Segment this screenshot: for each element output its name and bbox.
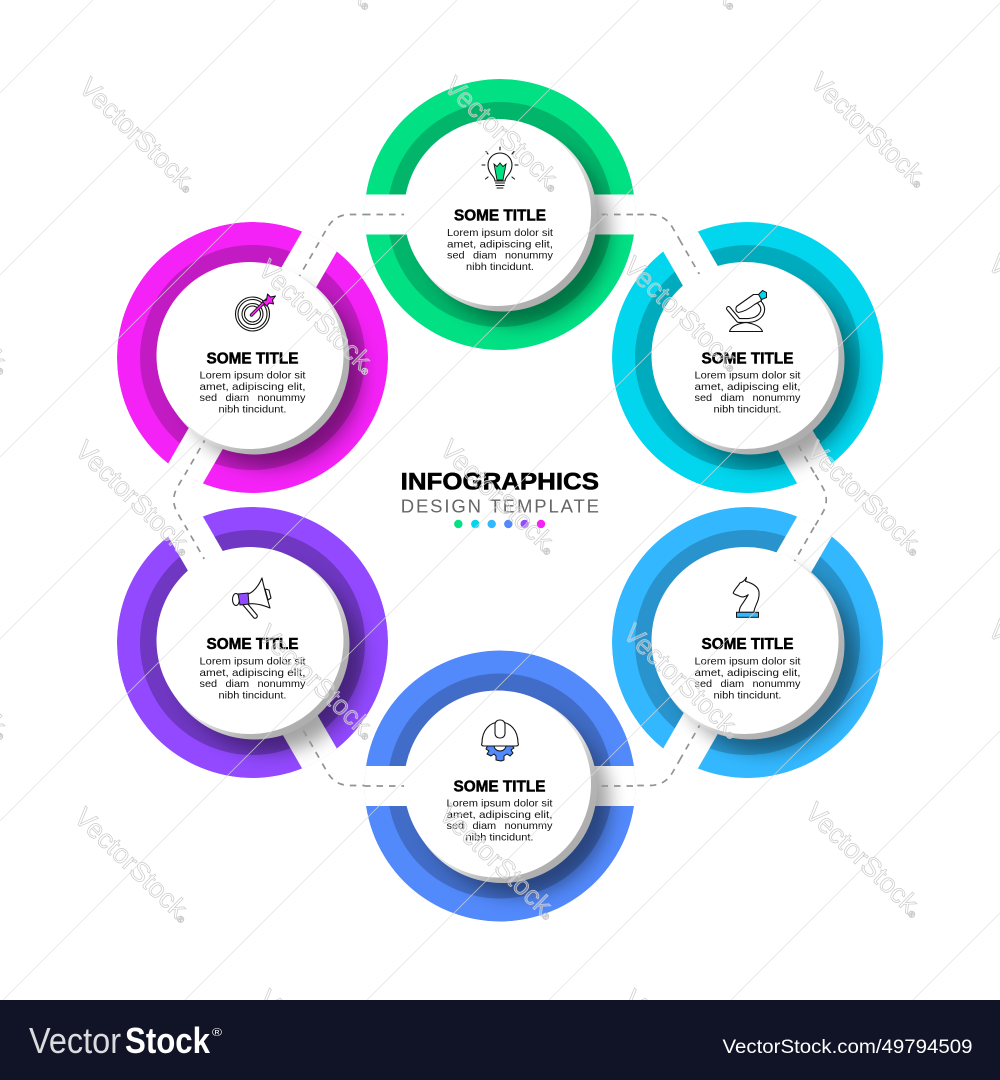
- ring: purple: [117, 507, 388, 778]
- body text: amet, adipiscing elit,: [200, 382, 306, 393]
- ring: green: [360, 79, 640, 350]
- legend dots: [454, 520, 545, 528]
- disc: white: [652, 547, 838, 734]
- body text: [447, 228, 554, 273]
- panel: step 1 green: [360, 79, 640, 350]
- body text: Lorem ipsum dolor sit: [694, 370, 801, 382]
- disc: crescent shadow: [407, 122, 597, 312]
- panel: step 5 purple: [117, 507, 388, 778]
- watermarks: VectorStock®: [800, 435, 930, 561]
- body text: amet, adipiscing elit,: [200, 668, 306, 679]
- body text: Lorem ipsum dolor sit: [200, 370, 306, 382]
- body text: [694, 656, 801, 702]
- icon: helmet and gear: [482, 720, 518, 761]
- footer url: VectorStock.com/49794509: [722, 1037, 972, 1058]
- title: SOME TITLE: [702, 636, 794, 653]
- watermarks: VectorStock®: [617, 251, 747, 377]
- watermarks: VectorStock®: [252, 254, 382, 380]
- title: SOME TITLE: [206, 350, 299, 368]
- disc: crescent shadow: [160, 550, 350, 740]
- disc: white: [156, 262, 344, 449]
- body text: sed diam nonummy: [200, 393, 306, 404]
- panel: step 6 magenta: [117, 222, 388, 493]
- body text: nibh tincidunt.: [466, 833, 534, 844]
- footer logo: ®: [212, 1027, 222, 1039]
- title: SOME TITLE: [702, 350, 794, 368]
- body text: [200, 370, 306, 416]
- ring: light blue: [612, 507, 883, 778]
- body text: [446, 799, 553, 844]
- watermarks: VectorStock®: [73, 72, 203, 198]
- watermarks: VectorStock®: [804, 67, 934, 193]
- body text: Lorem ipsum dolor sit: [200, 656, 306, 668]
- body text: nibh tincidunt.: [218, 404, 286, 416]
- icon: microscope: [728, 290, 766, 332]
- icon: chess knight: [733, 577, 759, 617]
- body text: amet, adipiscing elit,: [446, 810, 552, 821]
- body text: nibh tincidunt.: [218, 690, 286, 702]
- disc: white: [404, 119, 591, 306]
- body text: amet, adipiscing elit,: [694, 382, 800, 393]
- watermarks: VectorStock®: [617, 618, 747, 744]
- body text: amet, adipiscing elit,: [694, 668, 800, 679]
- body text: nibh tincidunt.: [714, 690, 782, 702]
- title: SOME TITLE: [454, 778, 546, 796]
- icon: light bulb: [482, 147, 518, 188]
- icon: megaphone: [232, 578, 271, 618]
- body text: amet, adipiscing elit,: [447, 240, 553, 250]
- body text: [200, 656, 306, 702]
- ring: magenta: [117, 222, 388, 493]
- ring: cyan: [612, 222, 883, 493]
- body text: nibh tincidunt.: [714, 404, 782, 416]
- disc: crescent shadow: [407, 693, 597, 883]
- body text: sed diam nonummy: [447, 250, 554, 262]
- footer logo: Stock: [125, 1020, 211, 1061]
- body text: sed diam nonummy: [446, 821, 553, 832]
- disc: white: [404, 690, 591, 878]
- body text: sed diam nonummy: [694, 393, 801, 404]
- footer logo: [29, 1020, 222, 1061]
- panel: step 3 light blue: [612, 507, 883, 778]
- body text: nibh tincidunt.: [466, 262, 534, 273]
- dashed connector path: [174, 214, 826, 786]
- disc: crescent shadow: [654, 550, 844, 740]
- disc: crescent shadow: [654, 264, 844, 454]
- watermarks: VectorStock®: [438, 71, 568, 197]
- watermarks: VectorStock®: [252, 619, 382, 745]
- body text: Lorem ipsum dolor sit: [447, 228, 553, 239]
- body text: sed diam nonummy: [200, 679, 306, 690]
- disc: white: [156, 547, 344, 734]
- body text: [694, 370, 801, 416]
- watermarks: VectorStock®: [799, 797, 929, 923]
- body text: sed diam nonummy: [694, 679, 801, 690]
- watermarks: VectorStock®: [434, 434, 564, 560]
- icon: target with arrow: [236, 294, 276, 331]
- title: SOME TITLE: [206, 636, 299, 653]
- panel: step 4 blue: [360, 650, 640, 922]
- footer bar: [0, 1000, 1000, 1080]
- disc: white: [652, 262, 838, 449]
- title: SOME TITLE: [454, 208, 546, 224]
- heading: infographics: INFOGRAPHICS: [401, 468, 599, 495]
- subheading: design template: DESIGN TEMPLATE: [401, 495, 599, 516]
- body text: Lorem ipsum dolor sit: [446, 799, 553, 810]
- watermarks: VectorStock®: [69, 435, 199, 561]
- footer logo: Vector: [29, 1020, 121, 1061]
- panel: step 2 cyan: [612, 222, 883, 493]
- watermarks: VectorStock®: [68, 802, 198, 928]
- watermarks: VectorStock®: [433, 799, 563, 925]
- disc: crescent shadow: [160, 264, 350, 454]
- body text: Lorem ipsum dolor sit: [694, 656, 801, 668]
- ring: blue: [360, 650, 640, 922]
